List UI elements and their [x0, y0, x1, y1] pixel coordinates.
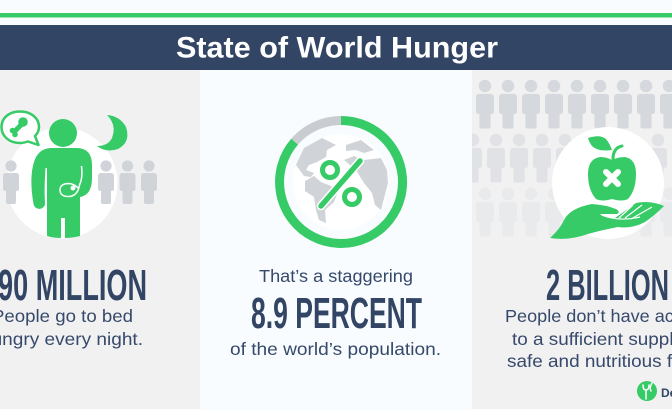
icon: percent sign	[321, 161, 360, 206]
title banner	[0, 25, 672, 70]
icon: speech bubble with food	[2, 112, 39, 145]
white circle	[6, 128, 118, 238]
title: State of World Hunger	[176, 32, 498, 64]
middle lead-in text: That’s a staggering	[259, 266, 413, 286]
panel: right background	[472, 70, 672, 409]
panel: left illustration	[2, 112, 157, 238]
white circle	[552, 127, 664, 239]
icon: hungry person	[31, 119, 92, 238]
logo	[637, 381, 672, 401]
middle description: of the world’s population.	[230, 339, 441, 359]
globe land masses	[296, 138, 388, 223]
icon: open hand	[550, 202, 664, 239]
progress ring	[280, 120, 403, 244]
panel: middle illustration	[280, 120, 403, 244]
left description	[0, 306, 143, 349]
middle stat number: 8.9 PERCENT	[251, 289, 422, 338]
panel: right illustration	[464, 80, 672, 239]
icon: apple with cross	[588, 136, 636, 200]
icon: gray people	[3, 160, 157, 204]
icon: crescent moon	[97, 115, 127, 150]
panel: left background	[0, 70, 200, 409]
right description	[505, 306, 672, 371]
top green rule	[0, 13, 672, 18]
people grid	[472, 80, 672, 182]
white globe disc	[293, 134, 389, 230]
